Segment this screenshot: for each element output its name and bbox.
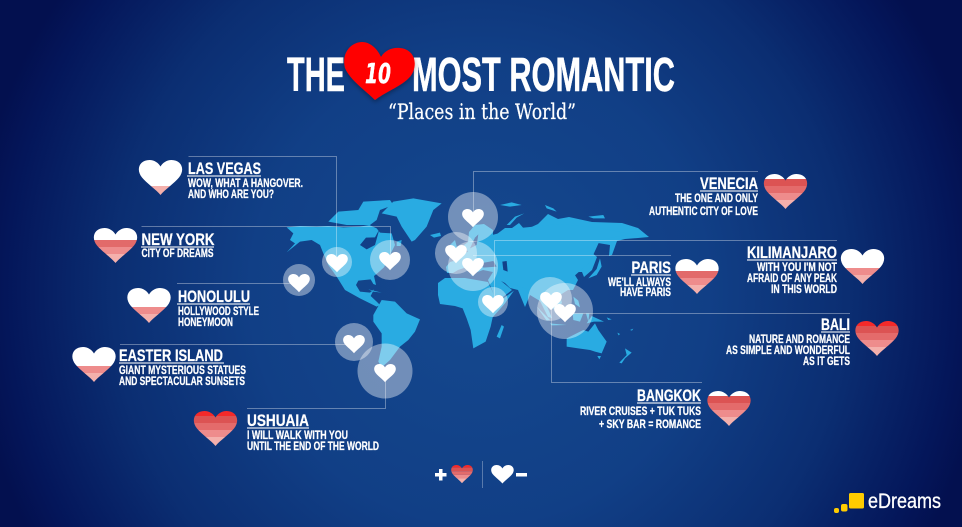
label: New York: NEW YORK — [142, 230, 215, 249]
subtitle: “Places in the World” — [388, 100, 576, 124]
connector lines — [120, 156, 850, 408]
label: Ushuaia — [194, 411, 379, 453]
label: Easter Island: EASTER ISLAND — [119, 346, 223, 365]
label: Venecia: VENECIA — [700, 174, 758, 193]
label: Paris: WE'LL ALWAYS — [608, 277, 671, 289]
marker: New York — [370, 240, 410, 280]
title: MOST ROMANTIC — [412, 49, 675, 102]
title heart with 10 — [344, 42, 415, 100]
title heart with 10: 10 — [365, 57, 391, 90]
heart: Honolulu — [127, 288, 171, 323]
label: Venecia: THE ONE AND ONLY — [675, 193, 758, 205]
label: Bangkok — [580, 389, 751, 428]
label: Kilimanjaro: IN THIS WORLD — [771, 284, 837, 296]
world map — [287, 198, 649, 367]
label: Ushuaia: UNTIL THE END OF THE WORLD — [247, 441, 379, 453]
heart: Easter Island — [72, 347, 116, 382]
label: Las Vegas: LAS VEGAS — [188, 159, 261, 178]
label: Bali — [726, 318, 899, 366]
label: Venecia — [649, 174, 808, 218]
label: Paris: PARIS — [632, 258, 671, 277]
legend plus — [435, 469, 446, 480]
label: Las Vegas: AND WHO ARE YOU? — [188, 189, 274, 201]
eDreams logo — [834, 490, 941, 513]
label: Ushuaia: I WILL WALK WITH YOU — [247, 430, 348, 442]
label: Bali: AS IT GETS — [803, 356, 850, 368]
label: Ushuaia: USHUAIA — [247, 411, 309, 430]
label: Bali: AS SIMPLE AND WONDERFUL — [726, 345, 850, 357]
marker: Easter Island — [335, 323, 373, 361]
heart: Ushuaia — [194, 411, 238, 446]
marker: Mediterranean — [448, 241, 498, 291]
label: Kilimanjaro: AFRAID OF ANY PEAK — [747, 273, 837, 285]
label: Bali: NATURE AND ROMANCE — [749, 334, 850, 346]
heart: Bali — [855, 321, 899, 356]
label: Bangkok: RIVER CRUISES + TUK TUKS — [580, 406, 701, 418]
marker: Ushuaia — [358, 344, 412, 398]
marker: Venecia — [448, 192, 498, 242]
legend colored heart — [451, 465, 473, 483]
label: Bangkok: BANGKOK — [637, 386, 702, 405]
heart: Las Vegas — [138, 160, 182, 195]
title: THE — [287, 49, 345, 102]
heart: Paris — [675, 259, 719, 294]
label: Easter Island: AND SPECTACULAR SUNSETS — [119, 376, 245, 388]
marker: Kilimanjaro — [478, 287, 508, 317]
label: Kilimanjaro — [747, 246, 884, 294]
label: New York: CITY OF DREAMS — [142, 248, 214, 260]
heart: Kilimanjaro — [840, 249, 884, 284]
label: Venecia: AUTHENTIC CITY OF LOVE — [649, 206, 758, 218]
label: Paris: HAVE PARIS — [620, 287, 671, 299]
label: Bangkok: + SKY BAR = ROMANCE — [599, 419, 701, 431]
legend — [435, 461, 527, 488]
label: Kilimanjaro: WITH YOU I'M NOT — [757, 262, 837, 274]
label: Easter Island — [72, 346, 246, 388]
heart: Venecia — [764, 174, 808, 209]
title — [287, 49, 675, 102]
heart: Bangkok — [707, 391, 751, 426]
label: Honolulu: HOLLYWOOD STYLE — [178, 306, 259, 318]
marker: Bali — [537, 283, 593, 339]
legend minus — [516, 473, 527, 476]
label: Honolulu — [127, 287, 259, 329]
label: Easter Island: GIANT MYSTERIOUS STATUES — [119, 365, 246, 377]
heart: New York — [94, 228, 138, 263]
label: Kilimanjaro: KILIMANJARO — [747, 243, 837, 262]
label: New York — [94, 228, 215, 263]
label: Honolulu: HONEYMOON — [178, 317, 233, 329]
label: Paris — [608, 258, 719, 299]
label: Honolulu: HONOLULU — [178, 287, 250, 306]
marker: Bangkok — [528, 277, 572, 321]
marker: Las Vegas — [322, 247, 352, 277]
location markers — [283, 192, 593, 398]
label: Bali: BALI — [821, 315, 850, 334]
marker: Paris — [435, 232, 477, 274]
legend white heart — [491, 465, 514, 484]
label: Las Vegas: WOW, WHAT A HANGOVER. — [188, 178, 303, 190]
marker: Honolulu — [283, 264, 315, 296]
label: Las Vegas — [138, 159, 303, 201]
eDreams logo: eDreams — [868, 490, 941, 513]
